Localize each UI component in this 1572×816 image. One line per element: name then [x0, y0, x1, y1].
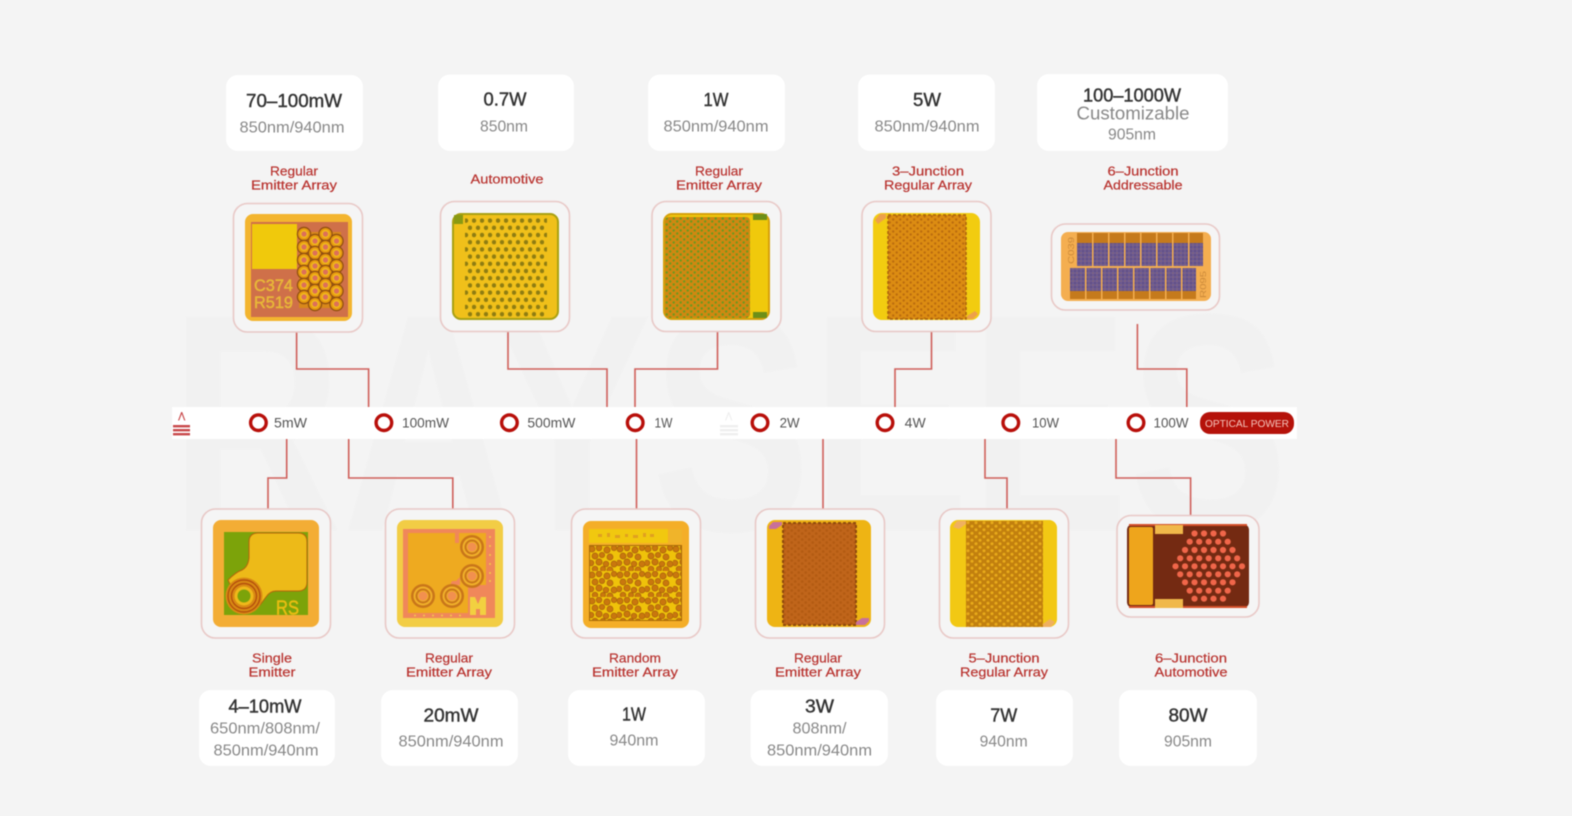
spec box — [568, 690, 705, 766]
product: 1W regular emitter array — [648, 74, 785, 332]
product: 1W random emitter array — [568, 509, 705, 766]
spec box: 850nm/940nm — [767, 742, 872, 760]
type label — [676, 164, 763, 192]
chip image — [756, 509, 884, 638]
spec box: 4–10mW — [228, 696, 302, 716]
product: 5W 3-junction regular array — [858, 74, 995, 332]
connector lines: upper products — [297, 324, 1187, 407]
spec box: 850nm/940nm — [398, 734, 504, 750]
chip image: C374 — [254, 276, 293, 295]
marker 2W — [752, 415, 800, 431]
product: 0.7W automotive — [438, 74, 574, 332]
chip image — [202, 509, 330, 638]
marker 100mW — [376, 415, 449, 431]
type label: 5–Junction — [968, 650, 1040, 666]
type label: Regular — [794, 650, 843, 666]
chip image: R095 — [1198, 271, 1208, 298]
spec box: 80W — [1168, 706, 1208, 726]
type label: Regular — [425, 650, 474, 666]
chip image — [234, 204, 362, 332]
type label: 6–Junction — [1155, 650, 1227, 666]
spec box: 808nm/ — [792, 720, 847, 738]
spec box: 850nm — [480, 118, 528, 136]
marker 10W — [1003, 415, 1059, 431]
icon: faded laser emission — [720, 412, 738, 435]
chip image — [1052, 224, 1220, 310]
type label — [960, 650, 1049, 680]
type label: Regular Array — [884, 178, 973, 192]
spec box: 905nm — [1164, 734, 1212, 750]
spec box: 850nm/940nm — [214, 742, 318, 760]
product: 80W 6-junction automotive — [1117, 516, 1259, 766]
spec box — [381, 690, 518, 766]
marker 1W — [627, 415, 673, 431]
spec box: 1W — [622, 704, 646, 724]
type label: Emitter Array — [592, 664, 679, 680]
marker 5mW — [251, 415, 307, 431]
type label: Single — [252, 650, 292, 666]
type label: Regular — [270, 164, 319, 178]
spec box: 850nm/940nm — [240, 120, 344, 136]
optical power axis — [172, 407, 1297, 439]
type label — [251, 164, 338, 192]
marker 500mW: 500mW — [527, 416, 576, 430]
spec box: 3W — [805, 696, 834, 716]
connector lines: lower products — [268, 439, 1191, 515]
marker 100W — [1128, 415, 1189, 431]
icon: laser emission — [173, 412, 190, 435]
spec box: 850nm/940nm — [874, 118, 980, 136]
marker 500mW — [502, 415, 576, 431]
spec box — [858, 74, 995, 151]
chip image — [1117, 516, 1259, 617]
type label — [884, 164, 973, 192]
chip image — [386, 509, 514, 638]
type label: Automotive — [1154, 664, 1228, 680]
type label — [592, 650, 679, 680]
product: 4–10mW single emitter — [199, 509, 335, 766]
spec box — [750, 690, 888, 766]
spec box — [936, 690, 1073, 766]
spec box: 7W — [990, 706, 1017, 726]
spec box — [1037, 74, 1228, 151]
type label: Automotive — [470, 172, 544, 186]
axis label pill: OPTICAL POWER — [1205, 418, 1289, 430]
marker 4W: 4W — [905, 416, 926, 430]
chip image — [652, 202, 781, 332]
chip image: R519 — [254, 293, 293, 312]
spec box — [438, 74, 574, 151]
marker 2W: 2W — [780, 416, 800, 430]
type label — [1154, 650, 1228, 680]
spec box — [226, 75, 363, 151]
type label — [406, 650, 493, 680]
type label: Emitter Array — [251, 178, 338, 192]
product: 3W regular emitter array — [750, 509, 888, 766]
type label: Random — [609, 650, 661, 666]
type label: Emitter Array — [406, 664, 493, 680]
spec box: 1W — [704, 90, 729, 110]
spec box: 940nm — [610, 732, 658, 750]
type label: Emitter Array — [676, 178, 763, 192]
marker 100mW: 100mW — [402, 416, 449, 430]
type label: Regular — [695, 164, 744, 178]
spec box: 70–100mW — [246, 91, 342, 111]
spec box: 905nm — [1108, 126, 1156, 144]
spec box: 100–1000W — [1083, 86, 1181, 106]
type label — [1104, 164, 1182, 192]
product: 20mW regular emitter array — [381, 509, 518, 766]
spec box: 650nm/808nm/ — [210, 720, 321, 738]
spec box: 0.7W — [484, 90, 527, 110]
axis label pill — [1200, 412, 1294, 434]
product: 7W 5-junction regular array — [936, 509, 1073, 766]
type label: Emitter — [248, 664, 296, 680]
spec box — [1119, 690, 1257, 766]
spec box — [648, 74, 785, 151]
chip image — [572, 509, 700, 638]
type label: Regular Array — [960, 664, 1049, 680]
spec box: 940nm — [980, 734, 1028, 750]
spec box: 850nm/940nm — [664, 118, 768, 136]
type label: Addressable — [1104, 178, 1182, 192]
marker 5mW: 5mW — [274, 416, 307, 430]
chip image: RS — [276, 598, 299, 620]
marker 100W: 100W — [1154, 416, 1189, 430]
marker 1W: 1W — [654, 416, 673, 430]
chip image — [862, 202, 991, 332]
marker 10W: 10W — [1032, 416, 1059, 430]
spec box — [199, 690, 335, 766]
product: 70–100mW regular emitter array — [226, 75, 363, 332]
type label: Emitter Array — [775, 664, 862, 680]
product: 100–1000W 6-junction addressable — [1037, 74, 1228, 310]
chip image — [940, 509, 1068, 638]
spec box: 5W — [913, 90, 941, 110]
type label — [775, 650, 862, 680]
type label — [248, 650, 296, 680]
spec box: 20mW — [424, 706, 478, 726]
spec box: Customizable — [1076, 102, 1190, 124]
chip image: C039 — [1066, 237, 1076, 264]
marker 4W — [877, 415, 926, 431]
type label: 6–Junction — [1108, 164, 1178, 178]
type label: 3–Junction — [892, 164, 964, 178]
chip image — [440, 202, 570, 332]
